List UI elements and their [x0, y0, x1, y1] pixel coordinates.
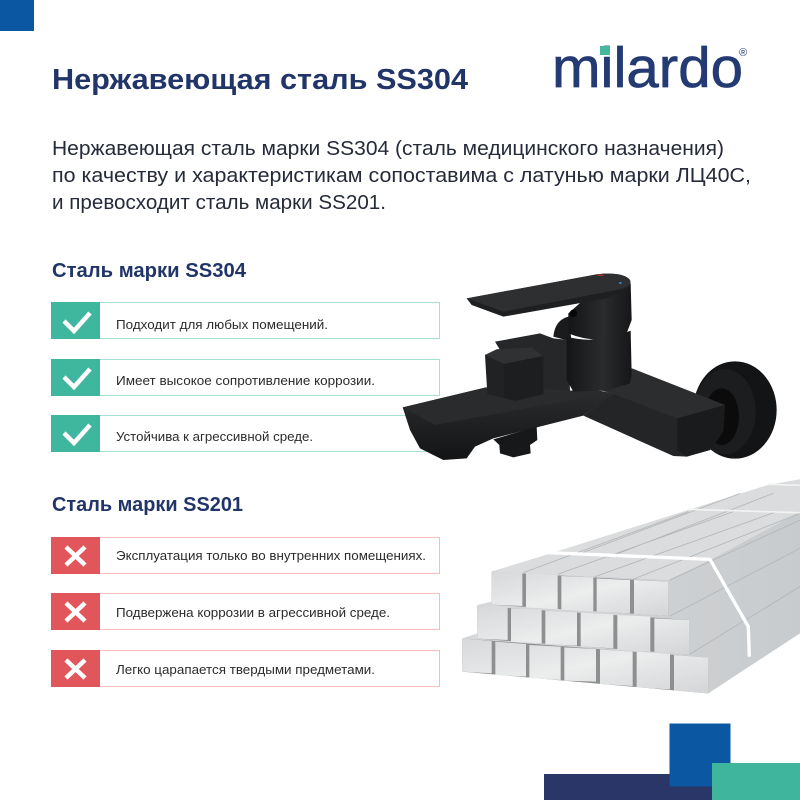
- item: scratches easily: [51, 650, 440, 687]
- intro paragraph: по качеству и характеристикам сопоставима с латунью марки ЛЦ40С,: [52, 165, 751, 187]
- strap: [548, 553, 749, 657]
- gaps between bar ends: [462, 572, 708, 693]
- spout: [403, 387, 613, 460]
- item: indoor only: Эксплуатация только во внутренних помещениях.: [116, 548, 426, 563]
- body cylinder upper: [568, 283, 632, 340]
- logo: milardo: ®: [739, 47, 747, 59]
- logo: milardo: milardo: [552, 36, 743, 100]
- right arm: [583, 368, 725, 457]
- bundle body: [462, 479, 800, 693]
- heading: SS304: Сталь марки SS304: [52, 260, 247, 282]
- wall flange: [693, 361, 777, 459]
- item: aggressive environment: Устойчива к агрессивной среде.: [116, 429, 313, 444]
- item: aggressive environment: [51, 415, 440, 452]
- corner square top left: [0, 0, 34, 31]
- intro paragraph: [52, 138, 751, 214]
- item: corrosion prone: [51, 593, 440, 630]
- intro paragraph: Нержавеющая сталь марки SS304 (сталь медицинского назначения): [52, 138, 724, 160]
- item: corrosion resistance: Имеет высокое сопротивление коррозии.: [116, 373, 375, 388]
- intro paragraph: и превосходит сталь марки SS201.: [52, 192, 386, 214]
- faucet illustration: [403, 274, 777, 460]
- lower outlet: [493, 427, 537, 457]
- panel: SS201 drawbacks: [51, 537, 440, 687]
- title: Нержавеющая сталь SS304: [52, 64, 468, 96]
- item: scratches easily: Легко царапается твердыми предметами.: [116, 662, 375, 677]
- handle plate: [467, 274, 630, 317]
- heading: SS201: Сталь марки SS201: [52, 494, 243, 516]
- knob: [485, 347, 543, 401]
- item: corrosion resistance: [51, 359, 440, 396]
- panel: SS304 advantages: [51, 302, 440, 452]
- item: corrosion prone: Подвержена коррозии в агрессивной среде.: [116, 605, 390, 620]
- back block: [495, 333, 570, 398]
- front faces: [462, 572, 708, 693]
- steel bars illustration: [462, 479, 800, 693]
- item: indoor only: [51, 537, 440, 574]
- item: any rooms: [51, 302, 440, 339]
- item: any rooms: Подходит для любых помещений.: [116, 317, 328, 332]
- decorative blocks bottom right: [544, 724, 800, 800]
- body cylinder lower: [567, 331, 632, 392]
